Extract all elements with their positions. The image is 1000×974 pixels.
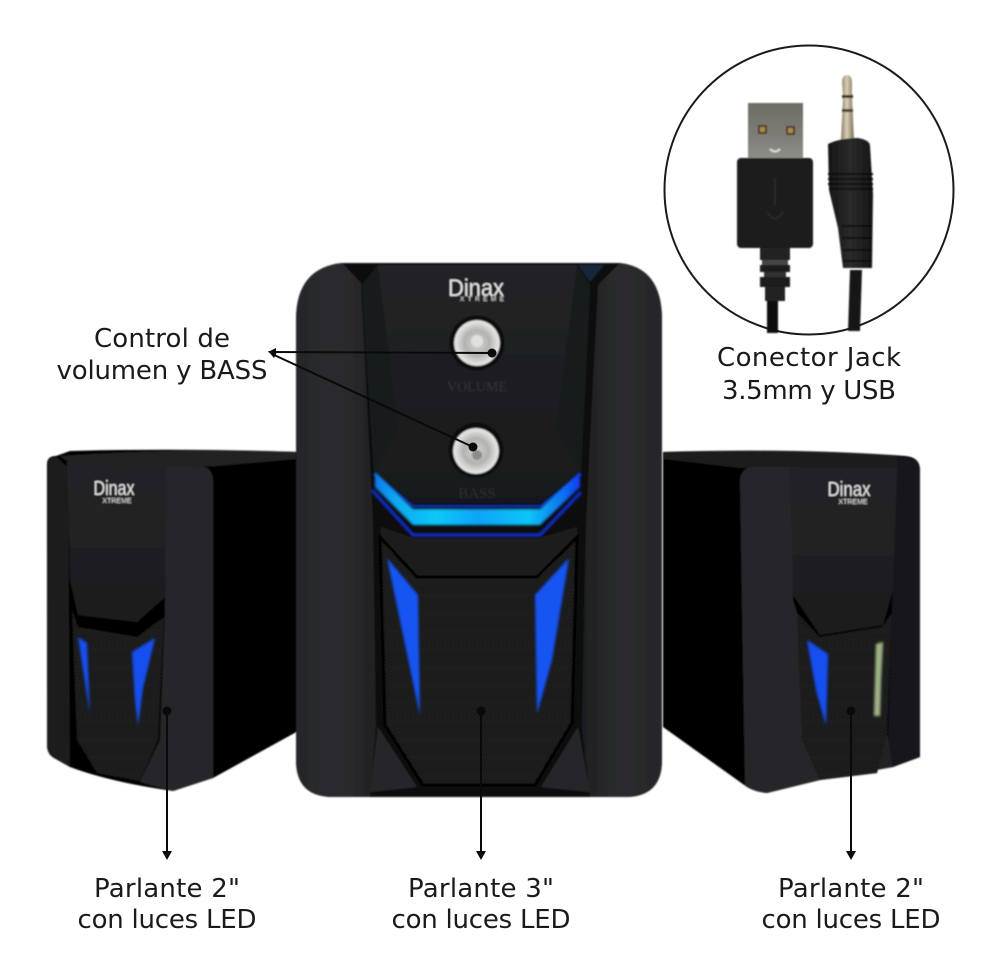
center speaker label: con luces LED (392, 905, 570, 935)
center blue light left (387, 558, 420, 716)
volume and bass label: volumen y BASS (56, 356, 268, 386)
connector label: Conector Jack (717, 343, 901, 373)
left speaker body (47, 450, 300, 791)
left speaker (47, 450, 300, 791)
center upper face (362, 265, 590, 503)
volume and bass label (56, 324, 268, 386)
right speaker body (663, 451, 920, 793)
center speaker logo: XTREME (460, 296, 505, 303)
top right blue reflection (578, 265, 604, 282)
connector circle (664, 46, 954, 334)
right speaker (663, 451, 920, 793)
bass label: BASS (458, 486, 496, 502)
connector label (717, 343, 901, 406)
center bottom corner right (541, 727, 590, 792)
usb connector (737, 103, 813, 333)
left speaker label: con luces LED (78, 905, 256, 935)
left speaker label (78, 874, 256, 935)
right green light (874, 642, 883, 716)
bass knob (448, 422, 504, 478)
left speaker top edge (60, 451, 296, 468)
center speaker label: Parlante 3" (408, 874, 554, 904)
right speaker logo: Dinax (828, 479, 870, 501)
right speaker label: Parlante 2" (778, 874, 924, 904)
left blue light 1 (78, 637, 90, 715)
blue light strip (372, 472, 581, 535)
callout arrow: right speaker (846, 706, 856, 860)
center speaker logo: Dinax (448, 275, 504, 302)
left speaker side strip (47, 458, 70, 767)
left blue light 2 (132, 638, 155, 726)
center left panel (296, 263, 376, 797)
left speaker front face (67, 462, 166, 622)
center inner bevels (362, 265, 590, 470)
center speaker body (296, 263, 662, 797)
center blue light right (535, 558, 569, 714)
callout arrow: bass knob (268, 351, 478, 452)
center lower bevel (381, 527, 577, 577)
center speaker label (392, 874, 570, 935)
volume label: VOLUME (447, 380, 507, 395)
callout arrow: center speaker (476, 706, 486, 860)
center speaker (296, 263, 662, 797)
right speaker top edge (664, 451, 897, 468)
right speaker front face (788, 467, 897, 635)
right speaker left panel (740, 467, 820, 793)
center right panel (582, 263, 662, 797)
right speaker grille (797, 613, 892, 780)
right speaker logo: XTREME (838, 499, 868, 506)
volume knob (450, 316, 504, 370)
right speaker label (762, 874, 940, 935)
left speaker right panel (140, 467, 213, 791)
jack connector (828, 75, 873, 331)
callout arrow: volume knob (268, 348, 496, 358)
right speaker label: con luces LED (762, 905, 940, 935)
volume and bass label: Control de (94, 324, 230, 354)
left speaker logo (94, 478, 134, 505)
right blue light (807, 640, 828, 726)
left speaker label: Parlante 2" (94, 874, 240, 904)
left speaker logo: Dinax (94, 478, 134, 500)
center bottom corner left (370, 727, 417, 792)
right speaker lower corner (820, 733, 893, 780)
connector label: 3.5mm y USB (722, 376, 896, 406)
left speaker grille (72, 610, 164, 781)
right speaker right strip (888, 457, 920, 767)
left speaker logo: XTREME (102, 498, 132, 505)
callout arrow: left speaker (162, 706, 172, 860)
center grille (380, 537, 577, 785)
